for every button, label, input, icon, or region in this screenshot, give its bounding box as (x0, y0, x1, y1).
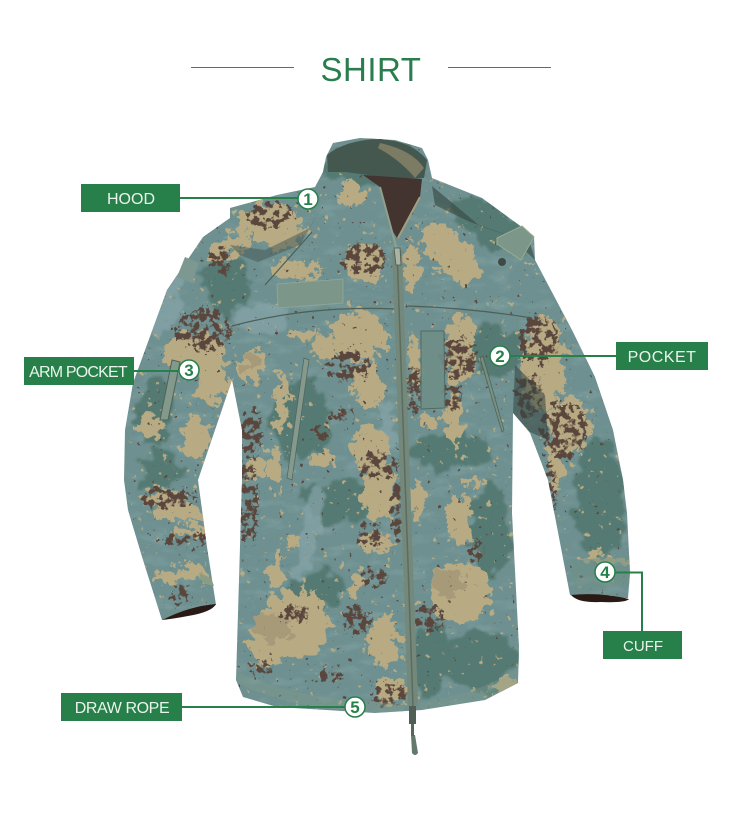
callout 4: cuff: CUFF (623, 638, 663, 655)
collar interior and lining (327, 139, 427, 250)
velcro shoulder patch (177, 257, 199, 283)
zipper pull (409, 706, 418, 755)
callout 4: cuff (595, 562, 682, 659)
jacket illustration (124, 138, 630, 755)
velcro hood patch (497, 226, 534, 260)
main zipper (397, 250, 413, 706)
callout 4: cuff: 4 (600, 563, 610, 582)
callout 5: draw rope (61, 693, 365, 721)
chest pocket flap (421, 331, 445, 409)
right cuff opening (571, 594, 629, 602)
sleeve zip pocket (160, 360, 180, 420)
infographic: shirt feature diagram (24, 58, 708, 755)
fine brown flecks (128, 144, 630, 708)
callout 2: pocket (490, 342, 708, 370)
zipper teeth line (397, 250, 413, 706)
callout 3: arm pocket: 3 (184, 361, 194, 380)
callout 1: hood (81, 184, 318, 212)
left cuff opening (162, 604, 216, 620)
callout 2: pocket: POCKET (628, 349, 696, 366)
zipper slider (394, 248, 401, 265)
callout 2: pocket: 2 (495, 347, 505, 366)
callout 1: hood: HOOD (107, 191, 155, 208)
title: SHIRT with side rules: SHIRT (321, 51, 421, 88)
callout 3: arm pocket (24, 357, 199, 385)
front yoke seams (232, 232, 532, 326)
right chest zip (480, 356, 504, 432)
fine tan flecks (128, 143, 622, 712)
velcro chest patch (277, 279, 343, 308)
callout 1: hood: 1 (303, 190, 313, 209)
left cuff tab (199, 573, 214, 586)
callout 5: draw rope: 5 (350, 698, 360, 717)
hood left shadow (230, 210, 320, 262)
left chest zip (287, 358, 309, 480)
callout 5: draw rope: DRAW ROPE (75, 700, 169, 717)
callout 3: arm pocket: ARM POCKET (29, 364, 128, 381)
hood collar shadow (432, 186, 535, 260)
hood toggle (498, 258, 506, 266)
